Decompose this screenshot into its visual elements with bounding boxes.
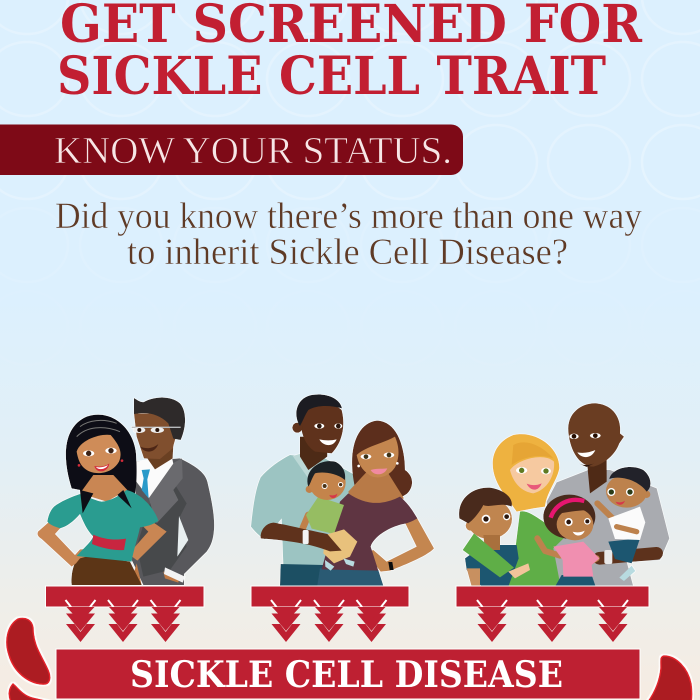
- woman with black hair: [38, 415, 167, 585]
- father's arm: [261, 523, 342, 551]
- man in grey suit: [125, 398, 214, 585]
- background gap by man's arm: [177, 516, 188, 557]
- title: SICKLE CELL TRAIT: [57, 46, 606, 107]
- ring pattern: [0, 0, 700, 365]
- banner: sickle cell disease: [56, 649, 640, 699]
- red bars: [46, 586, 649, 607]
- couple 2 illustration: [251, 394, 434, 586]
- mother with plum top: [317, 421, 434, 586]
- banner: know your status: [0, 124, 463, 175]
- blonde mother: [493, 434, 565, 587]
- baby with green shirt: [303, 461, 357, 571]
- couple 1 illustration: [38, 398, 214, 585]
- girl with pink dress: [537, 495, 599, 587]
- question text: [55, 196, 642, 273]
- question text: to inherit Sickle Cell Disease?: [127, 232, 568, 273]
- older boy: [459, 488, 519, 587]
- family 3 illustration: [459, 403, 669, 587]
- toddler in white shirt: [597, 467, 650, 581]
- mother's green arm: [463, 533, 530, 578]
- sickle cells: [7, 618, 692, 700]
- father with teal shirt: [251, 394, 360, 586]
- banner: sickle cell disease: SICKLE CELL DISEASE: [130, 654, 563, 696]
- bald father: [547, 403, 669, 587]
- title: [57, 0, 643, 107]
- chevron arrows: [66, 600, 628, 642]
- question text: Did you know there’s more than one way: [55, 196, 642, 237]
- banner: know your status: KNOW YOUR STATUS.: [54, 130, 452, 172]
